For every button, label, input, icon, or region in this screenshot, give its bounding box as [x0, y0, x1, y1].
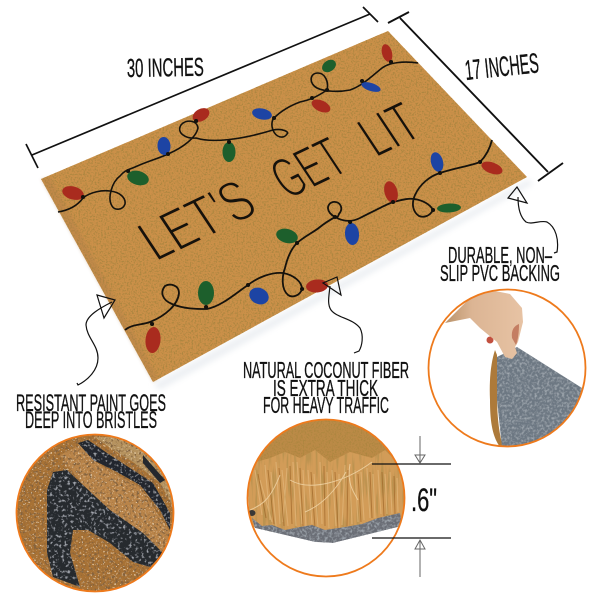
caption: DEEP INTO BRISTLES: [25, 407, 157, 434]
doormat: [41, 31, 533, 390]
circle: coconut fiber thickness close-up: [246, 418, 407, 580]
arrow: down: [415, 436, 425, 463]
finger shadow: [512, 324, 519, 345]
circle: painted bristles close-up: [15, 433, 175, 593]
dimension line: 30 inches: [26, 7, 378, 168]
fingertip: [486, 336, 494, 344]
callout: resistant paint: [16, 295, 166, 434]
thickness dimension: [372, 436, 451, 577]
word: LET'S: LET'S: [126, 167, 268, 273]
caption: RESISTANT PAINT GOES: [16, 390, 166, 417]
backing: [252, 513, 402, 543]
string of lights: bottom: [125, 140, 504, 354]
coir fibres: [255, 462, 398, 528]
circle: hand lifting mat backing: [428, 288, 586, 447]
mat edge: [490, 350, 503, 447]
word: GET: GET: [258, 125, 358, 211]
arrow: [508, 187, 558, 253]
callout: coconut fiber: [243, 277, 409, 418]
callout: PVC backing: [448, 187, 558, 268]
label: 30 inches: 30 INCHES: [127, 52, 204, 83]
arrow: [323, 277, 362, 353]
dimension line: 17 inches: [388, 12, 563, 181]
string of lights: top: [58, 43, 418, 212]
bulbs: [61, 43, 394, 202]
caption: [243, 357, 409, 418]
label: thickness: .6": [411, 482, 437, 518]
caption: FOR HEAVY TRAFFIC: [263, 392, 389, 418]
word: LIT: LIT: [346, 90, 432, 169]
hand: [445, 288, 523, 359]
mat lettering: [126, 90, 432, 273]
caption: [16, 390, 166, 434]
arrow: up: [415, 540, 425, 577]
PVC backing: [497, 347, 582, 447]
caption: NATURAL COCONUT FIBER: [243, 357, 409, 383]
caption: IS EXTRA THICK: [273, 375, 378, 401]
arrow: [77, 295, 115, 385]
bulbs: [144, 151, 504, 354]
